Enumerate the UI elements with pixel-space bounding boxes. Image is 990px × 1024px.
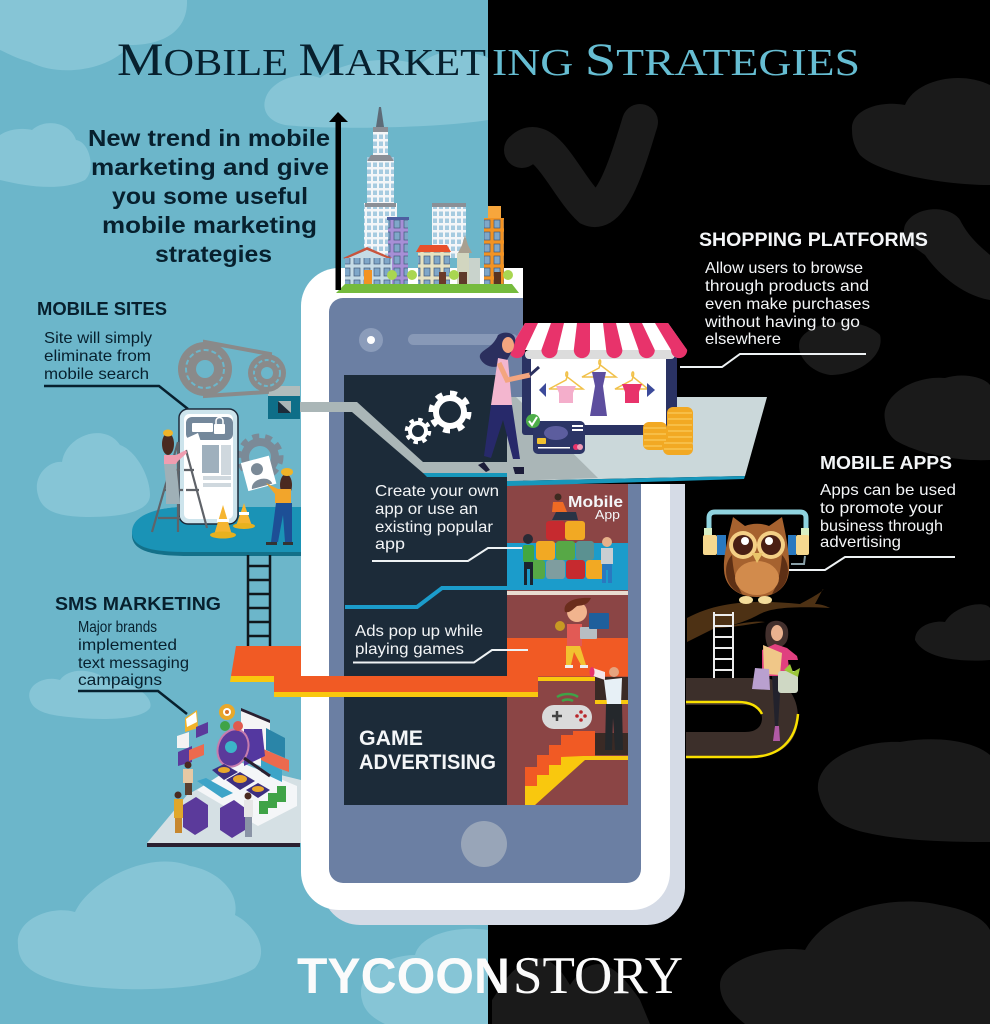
- description: Major brands: [78, 619, 157, 636]
- description: mobile search: [44, 366, 149, 383]
- speaker: [408, 334, 518, 345]
- login header: [186, 417, 233, 440]
- base: [147, 765, 301, 843]
- description: advertising: [820, 534, 901, 551]
- teal edges: [507, 476, 745, 486]
- orange stairs: [525, 731, 595, 805]
- tower spire: [376, 107, 384, 127]
- megaphone: [212, 725, 270, 776]
- credit card: [533, 421, 585, 454]
- app text block on screen: app or use an: [375, 501, 478, 518]
- worker on ladder: [162, 430, 187, 504]
- headline text block: [88, 125, 330, 267]
- eyes: [729, 531, 785, 559]
- headphone band lower segments: [708, 528, 805, 537]
- description: [820, 482, 956, 551]
- description: Apps can be used: [820, 482, 956, 499]
- sms isometric scene: [147, 704, 301, 847]
- traffic cones: [210, 503, 255, 538]
- clouds on teal side: [0, 0, 488, 1024]
- game controller: [542, 694, 592, 729]
- product pads: [212, 764, 270, 798]
- beak: [752, 553, 763, 563]
- mobile app label: Mobile: [568, 494, 623, 511]
- person at right kiosk: [244, 792, 253, 837]
- heading: SHOPPING PLATFORMS: [699, 230, 928, 251]
- owl body: [724, 517, 789, 597]
- bag tan: [763, 645, 782, 675]
- store: [509, 323, 693, 455]
- description: campaigns: [78, 672, 162, 689]
- description: [44, 330, 152, 383]
- platform top: [507, 397, 767, 481]
- valance shadow: [525, 350, 675, 359]
- right ear pad: [788, 535, 809, 555]
- gray walkway: [300, 397, 598, 481]
- hanger left shirt: [549, 372, 583, 403]
- gray gear behind photo: [239, 436, 281, 478]
- shopping platforms heading and text: [699, 230, 928, 348]
- kiosks: [183, 797, 245, 838]
- face: [502, 337, 514, 353]
- legs: [566, 646, 586, 665]
- game advertising heading: [359, 727, 496, 774]
- brown app column: [507, 484, 628, 805]
- description: to promote your: [820, 500, 944, 517]
- stepladder: [152, 442, 207, 532]
- boy on right: [601, 537, 613, 583]
- app text block on screen: app: [375, 536, 405, 553]
- mobile app label: App: [595, 507, 620, 522]
- heading: MOBILE APPS: [820, 453, 952, 473]
- mobile app label: [568, 494, 623, 522]
- church: [457, 235, 480, 285]
- face: [771, 625, 783, 641]
- description: [704, 260, 870, 348]
- password field: [192, 423, 213, 432]
- store window: [531, 356, 666, 425]
- description: implemented: [78, 637, 177, 654]
- check badge: [526, 414, 540, 428]
- heading: SMS MARKETING: [55, 594, 221, 614]
- torn paper: [187, 433, 201, 463]
- woman with shopping bags: [752, 621, 800, 741]
- yellow ledge under box: [583, 756, 628, 760]
- person sitting on blocks: [552, 494, 578, 520]
- leaves: [784, 664, 800, 677]
- camera: [359, 328, 383, 352]
- clouds on black side: [492, 78, 990, 1024]
- orange path: [230, 638, 628, 697]
- mobile apps leader line: [789, 557, 955, 570]
- owl with headphones: [703, 512, 809, 604]
- photo card: [241, 456, 276, 491]
- headline text block: you some useful: [112, 183, 308, 209]
- trousers: [484, 405, 520, 459]
- bag lilac: [752, 668, 770, 690]
- headline text block: mobile marketing: [102, 212, 317, 238]
- purple building: [387, 217, 409, 285]
- game advertising heading: GAME: [359, 727, 423, 750]
- top: [491, 358, 512, 405]
- medal: [555, 621, 565, 631]
- arm and tablet: [499, 363, 539, 380]
- side panels: [266, 728, 285, 758]
- blue strip: [197, 778, 233, 798]
- description: text messaging: [78, 655, 189, 672]
- trees: [387, 270, 513, 280]
- orange run: [274, 676, 538, 692]
- person at left kiosk: [174, 792, 183, 833]
- store frame: [522, 352, 677, 435]
- description: eliminate from: [44, 348, 151, 365]
- lower dark box: [595, 733, 628, 755]
- man with megaphone: [590, 667, 623, 750]
- lock: [214, 418, 225, 434]
- description: even make purchases: [705, 296, 870, 313]
- headline text block: New trend in mobile: [88, 125, 330, 151]
- app text block on screen: existing popular: [375, 519, 494, 536]
- teal divider line: [345, 588, 507, 607]
- target badge: [219, 704, 235, 720]
- gears icon on screen: [406, 393, 469, 442]
- boy with laptop: [555, 598, 609, 668]
- headline text block: strategies: [155, 241, 272, 267]
- left house: [343, 247, 392, 285]
- yellow stripes: [230, 676, 301, 682]
- ads text block: [355, 623, 483, 658]
- floating icons: [177, 722, 208, 766]
- woman with tablet: [478, 333, 539, 474]
- home button: [461, 821, 507, 867]
- boy in green: [523, 534, 534, 585]
- head: [567, 602, 587, 622]
- hair: [765, 621, 788, 647]
- city skyline: [336, 107, 519, 293]
- sms marketing heading and text: [55, 594, 221, 689]
- tycoon: TYCOON: [297, 948, 510, 1004]
- green cylinders: [259, 786, 286, 814]
- phone shadow: [322, 300, 685, 925]
- green and red dots: [220, 721, 230, 731]
- app leader line: [372, 548, 522, 561]
- description: without having to go: [704, 314, 860, 331]
- awning: [509, 323, 687, 358]
- content blocks: [202, 445, 231, 487]
- description: Site will simply: [44, 330, 152, 347]
- legs: [772, 676, 781, 728]
- app text block on screen: [375, 483, 499, 553]
- ground: [336, 284, 519, 293]
- blue window: [589, 613, 609, 629]
- belt: [205, 342, 270, 396]
- feet: [739, 596, 772, 604]
- left ear pad: [703, 535, 726, 555]
- belly: [735, 561, 779, 595]
- arrows: [539, 383, 655, 397]
- hanger centre dress: [582, 360, 616, 416]
- orange top: [231, 646, 301, 676]
- mini phone under construction: [179, 409, 238, 524]
- tower lower: [364, 203, 397, 258]
- title teal part: ING STRATEGIES: [492, 34, 860, 86]
- headphone band: [709, 512, 806, 538]
- description: [78, 619, 189, 689]
- description: elsewhere: [705, 331, 781, 348]
- blue band: [507, 543, 628, 590]
- app blocks pyramid: [532, 521, 605, 579]
- ads text block: playing games: [355, 641, 464, 658]
- mobile sites leader line: [44, 386, 188, 409]
- wings: [726, 555, 788, 594]
- tower middle: [367, 155, 394, 203]
- story: STORY: [513, 947, 683, 1005]
- shopping leader line: [680, 354, 866, 367]
- white platform: [197, 762, 297, 826]
- sms leader line: [78, 691, 187, 714]
- black ladder: [248, 555, 270, 648]
- description: business through: [820, 518, 943, 535]
- black mask hiding phone top right: [523, 262, 713, 484]
- heading: MOBILE SITES: [37, 299, 167, 319]
- hair: [480, 333, 515, 367]
- mobile sites heading and text: [37, 299, 167, 383]
- hanger right shirt: [615, 372, 648, 403]
- connector box: [268, 386, 300, 419]
- yellow bar under box: [595, 700, 628, 704]
- store platform: [300, 397, 767, 486]
- phone body: [301, 268, 670, 910]
- big gear: [178, 342, 232, 396]
- yellow ledge: [538, 677, 595, 681]
- pink jacket: [762, 644, 798, 676]
- second tower: [432, 203, 466, 258]
- title: [117, 34, 860, 86]
- orange building: [484, 206, 504, 285]
- branch: [687, 589, 830, 642]
- game advertising heading: ADVERTISING: [359, 751, 496, 774]
- app text block on screen: Create your own: [375, 483, 499, 500]
- upper dark box: [595, 677, 628, 700]
- laptop: [580, 627, 597, 639]
- tower top: [373, 127, 388, 155]
- road: [686, 678, 798, 757]
- small gear: [248, 354, 286, 392]
- gear belt icon: [178, 342, 286, 396]
- phone: [301, 268, 685, 925]
- island: [132, 507, 301, 556]
- white ladder: [714, 612, 733, 688]
- mobile apps heading and text: [820, 453, 956, 551]
- shirt: [567, 624, 582, 646]
- phone screen: [329, 298, 641, 883]
- headphone cable: [791, 556, 805, 564]
- hair: [565, 598, 591, 612]
- red roof house: [416, 245, 451, 285]
- yellow stripes: [686, 702, 762, 714]
- dark screen panel: [344, 375, 507, 805]
- bag green: [778, 671, 798, 693]
- ads leader line: [353, 650, 528, 662]
- worker with photo: [266, 468, 293, 545]
- upward arrow: [329, 112, 348, 290]
- ads text block: Ads pop up while: [355, 623, 483, 640]
- tycoonstory logo: [297, 947, 683, 1005]
- cream strip: [507, 591, 628, 595]
- display board: [241, 710, 270, 770]
- shoes: [478, 462, 524, 474]
- title dark part: MOBILE MARKET: [117, 34, 486, 86]
- person standing: [183, 762, 193, 795]
- description: through products and: [705, 278, 869, 295]
- envelope: [185, 710, 198, 732]
- coins: [643, 407, 693, 455]
- orange block in column: [507, 638, 628, 676]
- headline text block: marketing and give: [91, 154, 329, 180]
- yellow stair edge: [525, 756, 627, 805]
- description: Allow users to browse: [705, 260, 863, 277]
